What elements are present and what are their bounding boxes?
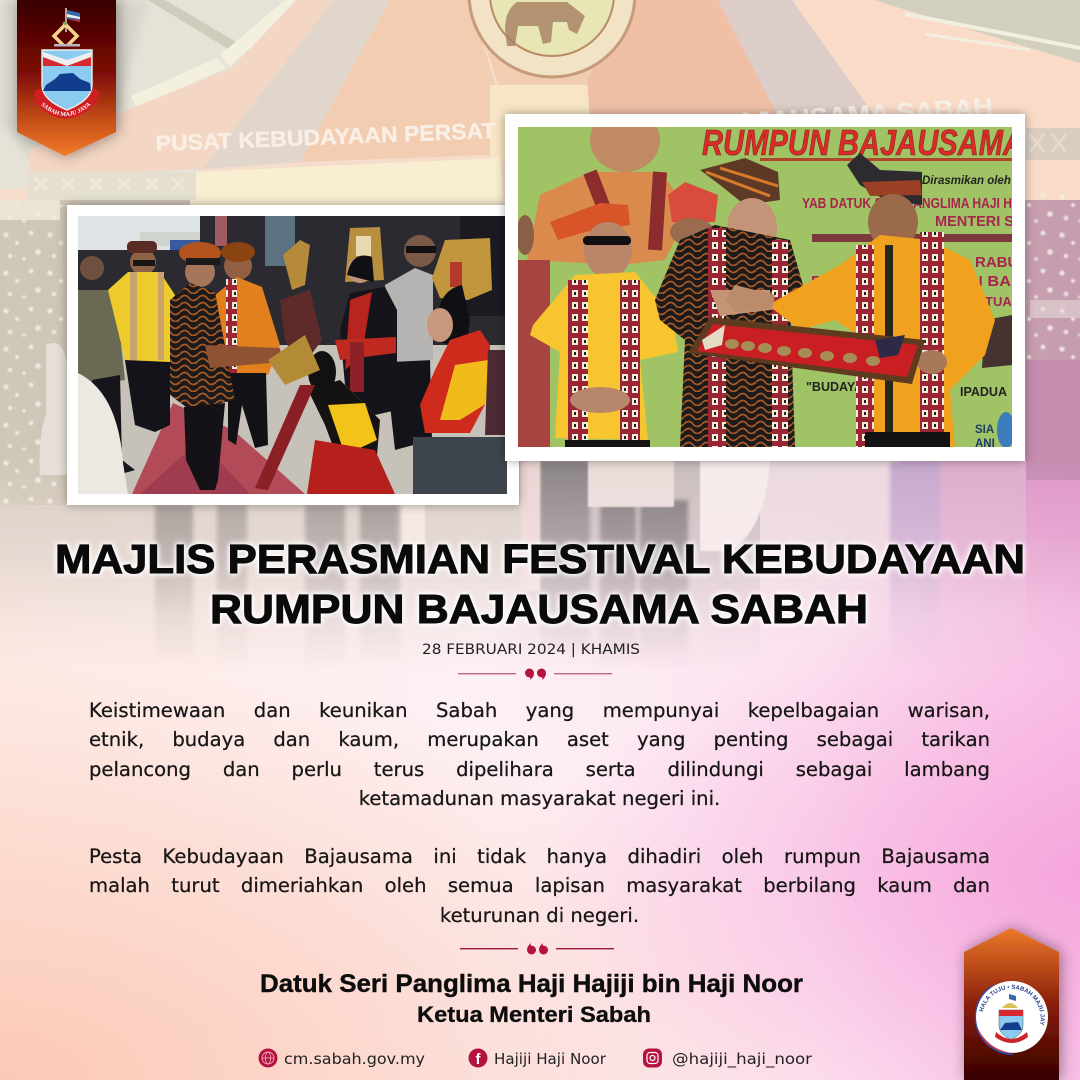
foreground blurs xyxy=(78,373,128,494)
body paragraph 2: keturunan di negeri. xyxy=(440,904,639,927)
banner text xyxy=(702,122,1025,450)
roof xyxy=(0,0,924,200)
framed gong set xyxy=(688,317,925,384)
red carpet xyxy=(132,403,305,494)
dark dress behind xyxy=(390,360,432,450)
body paragraph 2: Pesta Kebudayaan Bajausama ini tidak hanya dihadiri oleh rumpun Bajausama xyxy=(89,845,990,868)
divider: closing quote xyxy=(460,943,614,954)
speaker role: Ketua Menteri Sabah xyxy=(417,1002,651,1027)
orange shirt man xyxy=(214,242,280,448)
batik man xyxy=(170,242,282,490)
banner text: "BUDAYA xyxy=(806,380,863,394)
body paragraph 2: malah turut dimeriahkan oleh semua lapisan masyarakat berbilang kaum dan xyxy=(89,874,990,897)
icon: motto ribbon xyxy=(33,89,99,118)
contact: website: cm.sabah.gov.my xyxy=(284,1050,425,1068)
banner text: MENTERI SA xyxy=(935,214,1025,230)
icon: flag xyxy=(54,8,80,46)
yellow dancer xyxy=(420,238,507,435)
man in yellow xyxy=(530,203,678,450)
below the frames xyxy=(0,505,520,596)
banner text: PUSAT KEBUDAYAAN BA xyxy=(811,274,1012,290)
photo frame: welcoming dancers xyxy=(60,198,526,512)
contact: facebook: f xyxy=(476,1051,482,1068)
body paragraph 2 xyxy=(89,845,990,927)
title: MAJLIS PERASMIAN FESTIVAL KEBUDAYAAN xyxy=(55,536,1025,582)
contact: facebook: Hajiji Haji Noor xyxy=(494,1050,607,1068)
background photo collage: RUMPUN BAJAUSAMA SABAH xyxy=(589,93,994,145)
banner text: TUA xyxy=(985,294,1012,309)
photo frame: presentation ceremony xyxy=(498,108,1032,468)
yellow shirt man xyxy=(108,241,175,432)
edge man xyxy=(518,260,550,447)
emblem on the roof xyxy=(469,0,635,77)
contact: instagram xyxy=(643,1048,813,1069)
banner text: RABU xyxy=(975,254,1018,271)
body paragraph 1 xyxy=(89,699,990,810)
banner text: Dirasmikan oleh xyxy=(922,175,1011,187)
body paragraph 1: pelancong dan perlu terus dipelihara serta dilindungi sebagai lambang xyxy=(89,758,990,781)
red black dancer xyxy=(335,227,397,415)
kneeling dancer xyxy=(255,335,395,494)
poster man xyxy=(527,127,676,264)
contact: instagram: @hajiji_haji_noor xyxy=(672,1050,813,1069)
man in orange xyxy=(725,153,995,447)
roof signage: PUSAT KEBUDAYAAN PERSAT xyxy=(155,118,497,156)
speaker name: Datuk Seri Panglima Haji Hajiji bin Haji Noor xyxy=(260,970,803,998)
logo banner: slogan badge: HALA TUJU • SABAH MAJU JAYA xyxy=(979,984,1045,1026)
banner text: YAB DATUK SERI PANGLIMA HAJI H xyxy=(802,196,1012,212)
wall band xyxy=(196,158,504,200)
icon: motto ribbon: SABAH MAJU JAYA xyxy=(41,102,91,116)
dancer behind xyxy=(280,240,322,353)
body paragraph 1: Keistimewaan dan keunikan Sabah yang mempunyai kepelbagaian warisan, xyxy=(89,699,990,722)
divider: opening quote xyxy=(458,668,612,680)
banner text: IPADUA xyxy=(960,385,1007,399)
body paragraph 1: etnik, budaya dan kaum, merupakan aset yang penting sebagai tarikan xyxy=(89,728,990,751)
date: 28 FEBRUARI 2024 | KHAMIS xyxy=(422,642,640,658)
grey shirt man xyxy=(385,235,436,362)
title xyxy=(55,536,1025,632)
body paragraph 1: ketamadunan masyarakat negeri ini. xyxy=(359,787,720,810)
icon: shield xyxy=(42,50,92,110)
central man in batik xyxy=(655,158,803,447)
banner text: ANI xyxy=(975,438,995,450)
crowd left: khaki man xyxy=(78,256,135,475)
banner text: SIA xyxy=(975,424,994,436)
background man in red hat xyxy=(668,182,718,246)
mid photo xyxy=(0,200,1080,505)
title: RUMPUN BAJAUSAMA SABAH xyxy=(210,586,868,632)
